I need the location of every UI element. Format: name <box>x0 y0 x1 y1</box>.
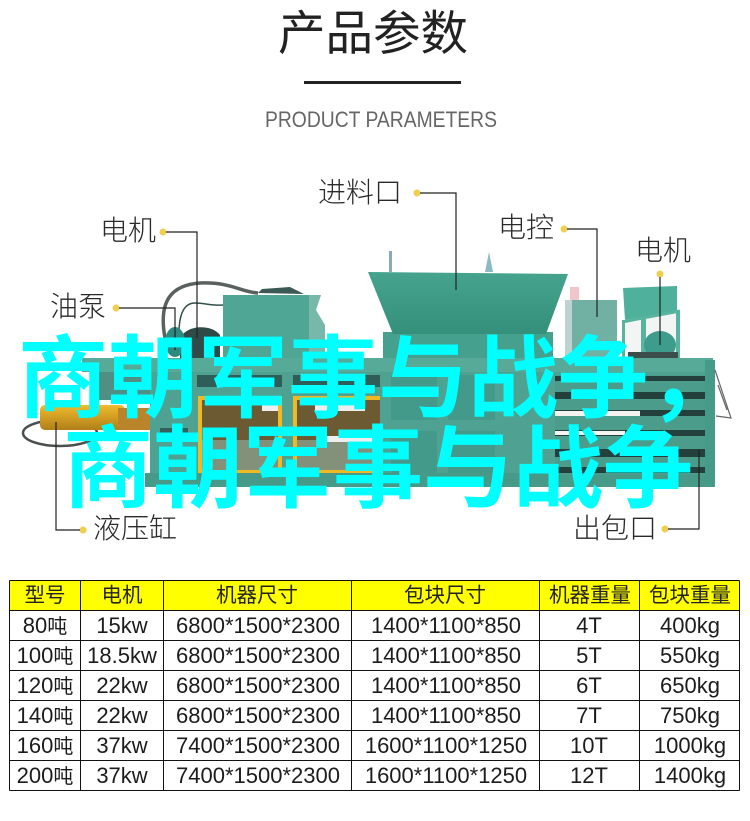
callout: 油泵: 油泵 <box>50 285 106 325</box>
row 80吨: 6800*1500*2300 <box>176 613 340 638</box>
row 160吨 <box>17 730 726 759</box>
table header row: 电机 <box>102 578 143 608</box>
callout: 电机 left: 电机 <box>100 209 156 249</box>
row 200吨: 1400kg <box>654 763 726 788</box>
callout: 电机 left <box>100 209 197 338</box>
hydraulic cylinder <box>23 405 153 446</box>
row 80吨: 4T <box>576 613 602 638</box>
electric control cabinet <box>565 287 617 360</box>
row 200吨: 1600*1100*1250 <box>365 763 527 788</box>
row 200吨: 200吨 <box>17 760 73 789</box>
row 140吨: 7T <box>576 703 602 728</box>
row 140吨: 140吨 <box>17 700 73 729</box>
callout: 电控: 电控 <box>498 206 554 246</box>
cyan overlay headline <box>18 306 738 526</box>
callout: 进料口: 进料口 <box>318 171 402 211</box>
baler ram section <box>82 359 152 400</box>
row 80吨 <box>23 610 720 639</box>
table grid <box>10 580 740 790</box>
cyan overlay headline: 商朝军事与战争， <box>18 306 738 436</box>
callout: 油泵 <box>50 285 175 350</box>
bale chamber slats <box>555 360 715 487</box>
table header row: 机器重量 <box>549 578 631 608</box>
row 100吨: 18.5kw <box>87 643 157 668</box>
yellow inspection window left <box>198 396 282 473</box>
row 160吨: 160吨 <box>17 730 73 759</box>
hydraulic hose <box>163 283 258 338</box>
row 140吨: 750kg <box>660 703 720 728</box>
row 80吨: 15kw <box>96 613 148 638</box>
row 100吨 <box>17 640 720 669</box>
left motor housing <box>223 287 325 363</box>
callout: 进料口 <box>318 171 456 290</box>
thin control wire <box>179 303 223 340</box>
machine illustration <box>23 251 731 487</box>
row 200吨 <box>17 760 726 789</box>
row 160吨: 37kw <box>96 733 148 758</box>
row 100吨: 1400*1100*850 <box>371 643 521 668</box>
row 80吨: 400kg <box>660 613 720 638</box>
row 120吨: 22kw <box>96 673 148 698</box>
table header row: 机器尺寸 <box>216 578 298 608</box>
callout: 液压缸: 液压缸 <box>93 507 177 547</box>
callout: 出包口 <box>573 450 699 547</box>
row 200吨: 37kw <box>96 763 148 788</box>
row 200吨: 12T <box>570 763 608 788</box>
callout: 电机 right: 电机 <box>635 229 691 269</box>
row 100吨: 5T <box>576 643 602 668</box>
row 100吨: 550kg <box>660 643 720 668</box>
row 100吨: 6800*1500*2300 <box>176 643 340 668</box>
row 140吨 <box>17 700 720 729</box>
specification table <box>10 578 740 790</box>
table header background <box>10 581 739 610</box>
row 140吨: 1400*1100*850 <box>371 703 521 728</box>
row 120吨: 6800*1500*2300 <box>176 673 340 698</box>
table header row: 包块重量 <box>649 578 731 608</box>
title underline <box>304 81 461 84</box>
row 140吨: 6800*1500*2300 <box>176 703 340 728</box>
cyan overlay headline: 商朝军事与战争 <box>63 396 693 526</box>
row 160吨: 10T <box>570 733 608 758</box>
callout: 液压缸 <box>56 422 177 547</box>
right hydraulic station <box>622 286 680 359</box>
subtitle: PRODUCT PARAMETERS <box>265 107 497 132</box>
row 120吨: 650kg <box>660 673 720 698</box>
row 120吨: 6T <box>576 673 602 698</box>
row 120吨: 120吨 <box>17 670 73 699</box>
row 100吨: 100吨 <box>17 640 73 669</box>
feed hopper <box>368 251 568 362</box>
row 160吨: 1600*1100*1250 <box>365 733 527 758</box>
callout: 出包口: 出包口 <box>573 507 657 547</box>
table header row: 包块尺寸 <box>404 578 486 608</box>
yellow inspection window right <box>293 396 380 473</box>
left oil pump <box>165 327 220 358</box>
row 80吨: 1400*1100*850 <box>371 613 521 638</box>
row 160吨: 1000kg <box>654 733 726 758</box>
row 200吨: 7400*1500*2300 <box>176 763 340 788</box>
row 80吨: 80吨 <box>23 610 67 639</box>
wire rack <box>715 370 731 418</box>
baler main frame <box>82 358 713 487</box>
table header row <box>24 578 731 608</box>
callout: 电控 <box>498 206 597 317</box>
row 140吨: 22kw <box>96 703 148 728</box>
row 120吨 <box>17 670 720 699</box>
callout: 电机 right <box>635 229 691 345</box>
row 160吨: 7400*1500*2300 <box>176 733 340 758</box>
row 120吨: 1400*1100*850 <box>371 673 521 698</box>
table header row: 型号 <box>24 578 66 608</box>
